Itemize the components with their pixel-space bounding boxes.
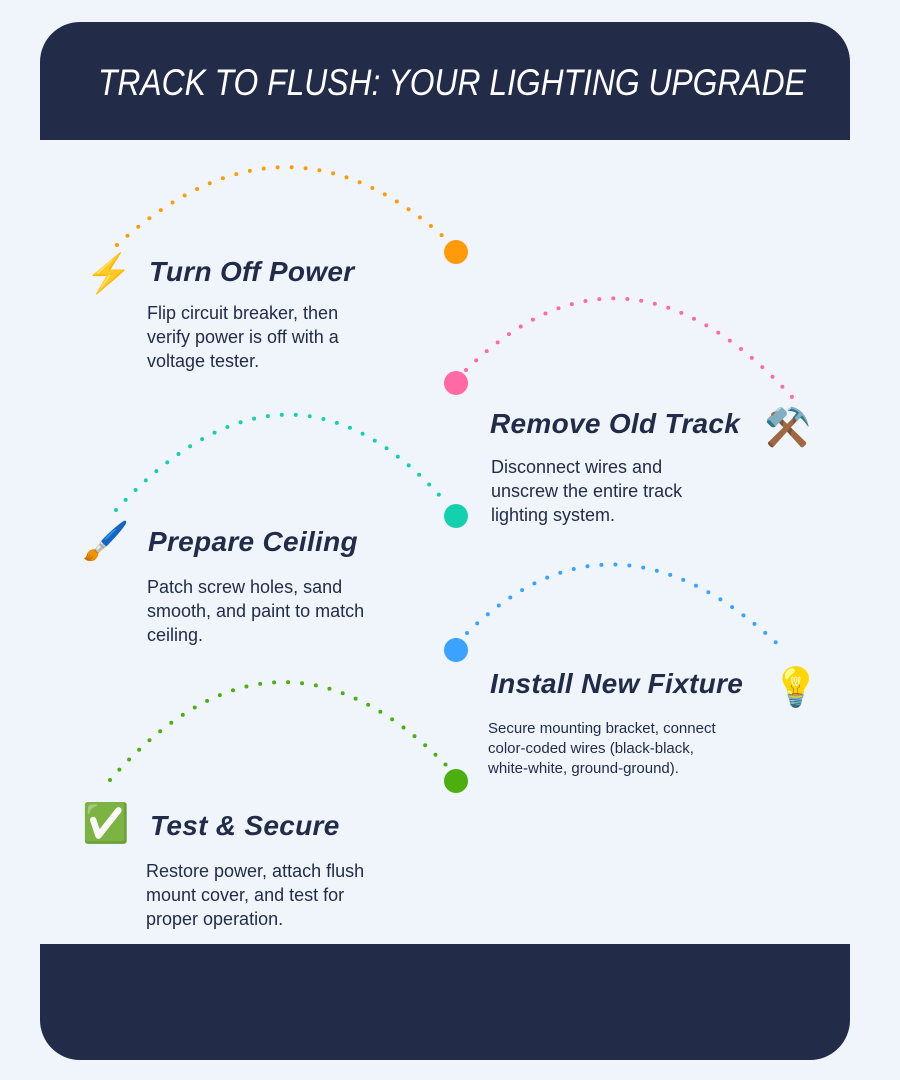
- text: Disconnect wires and: [491, 457, 662, 477]
- step 3: prepare ceiling: [82, 520, 364, 645]
- text: [146, 861, 364, 929]
- heading: Prepare Ceiling: [148, 526, 358, 557]
- text: mount cover, and test for: [146, 885, 344, 905]
- icon: paintbrush: 🖌️: [82, 520, 129, 564]
- title: TRACK TO FLUSH: YOUR LIGHTING UPGRADE: [98, 62, 806, 103]
- text: lighting system.: [491, 505, 615, 525]
- text: white-white, ground-ground).: [488, 760, 679, 777]
- text: Secure mounting bracket, connect: [488, 720, 716, 737]
- heading: Turn Off Power: [149, 256, 354, 287]
- heading: Remove Old Track: [490, 408, 740, 439]
- step 2: remove old track: [490, 406, 811, 525]
- text: verify power is off with a: [147, 327, 339, 347]
- heading: Test & Secure: [150, 810, 340, 841]
- icon: check: ✅: [82, 802, 129, 846]
- icon: tools: ⚒️: [764, 406, 811, 450]
- text: [147, 577, 364, 645]
- step 5: test & secure: [82, 802, 364, 929]
- text: voltage tester.: [147, 351, 259, 371]
- text: Patch screw holes, sand: [147, 577, 342, 597]
- footer banner: [40, 944, 850, 1060]
- icon: lightning: ⚡: [85, 252, 132, 296]
- heading: Install New Fixture: [490, 668, 743, 699]
- step 1: turn off power: [85, 252, 356, 371]
- header banner: [40, 22, 850, 140]
- text: [491, 457, 682, 525]
- text: ceiling.: [147, 625, 203, 645]
- text: Restore power, attach flush: [146, 861, 364, 881]
- text: proper operation.: [146, 909, 283, 929]
- text: unscrew the entire track: [491, 481, 682, 501]
- text: smooth, and paint to match: [147, 601, 364, 621]
- text: [488, 720, 716, 777]
- step 4: install new fixture: [488, 666, 819, 777]
- text: color-coded wires (black-black,: [488, 740, 694, 757]
- icon: light bulb: 💡: [772, 666, 819, 710]
- text: [147, 303, 339, 371]
- text: Flip circuit breaker, then: [147, 303, 338, 323]
